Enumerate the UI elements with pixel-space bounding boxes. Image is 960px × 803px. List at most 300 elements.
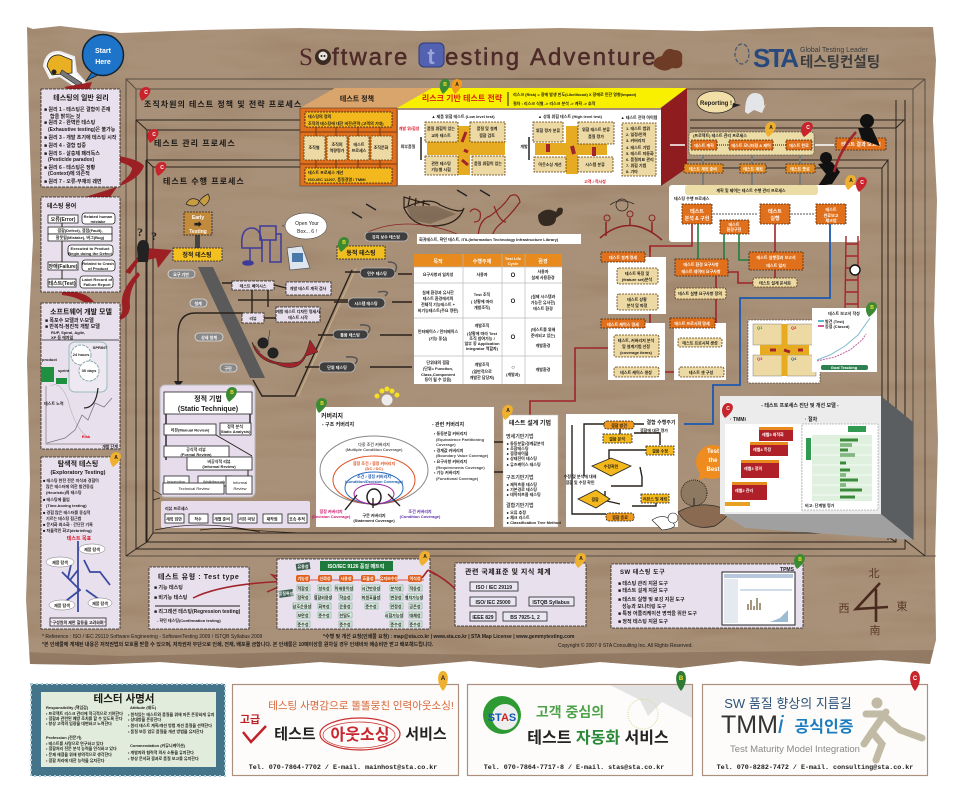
pin: C organisational: C: [144, 90, 148, 96]
ad: tester mission statement: Attitude (태도): [130, 704, 157, 710]
table: test levels: 비기능테스트(주요 평판): [418, 307, 459, 313]
quadrant chart: Q2: [791, 325, 797, 330]
panel: test execution process: 테스트: [690, 208, 704, 215]
top level characteristic boxes: 신뢰성: [319, 575, 331, 581]
test levels: 통합 테스팅: [340, 332, 360, 338]
icon: ghost: [745, 93, 766, 114]
management to execution links: 테스트 계획 준비: [689, 166, 717, 172]
V-model diagram: [168, 232, 412, 396]
panel: software development models: [41, 303, 120, 449]
panel: test type: [149, 567, 249, 629]
table: test levels: 개발조직): [474, 304, 491, 310]
panel: static technique: Technical Review: [179, 486, 210, 491]
panel: test execution process: 테스트: [825, 206, 837, 212]
project test management process: 테스트 모니터링 & 제어: [731, 142, 771, 148]
ad: TMMi certification: TMMi: [721, 711, 785, 739]
panel: coverage: (Condition/Decision Coverage): [345, 479, 404, 484]
sub characteristic labels: 공존성: [409, 603, 421, 609]
panel: test execution process: [669, 185, 860, 242]
character with question mark: ?: [151, 229, 157, 243]
panel: SW test tools: ■ 테스트 설계 지원 도구: [618, 587, 668, 594]
pin: B ad: [676, 671, 686, 691]
top level characteristic boxes: 이식성: [409, 575, 421, 581]
TMMi staircase: [725, 424, 801, 512]
panel: test execution process: 테스트: [728, 221, 740, 227]
panel: test execution process: 체크업: [825, 217, 837, 223]
table: test levels: 개발조직: [475, 361, 490, 367]
sketches: ship and ornaments: [352, 190, 662, 244]
panel: test design techniques: ▸ 체크 리스트: [506, 514, 530, 520]
table: test levels: 단위내의 결함: [426, 359, 450, 365]
panel: software development models: ■ 반복적-점진적 개발 모델: [45, 323, 100, 330]
sub characteristic labels: 적합성: [297, 585, 309, 591]
TMMi staircase: 레벨4 측정: [753, 446, 771, 452]
policy front face: 조직의 테스팅에 대한 비전/전략 (고객의 기대): [308, 120, 384, 126]
ad: tester mission statement: • 개발자와 협력적 의사 소통을 유지한다: [128, 749, 194, 755]
panel: test design specification: 테스트 특징 및: [625, 270, 649, 276]
panel: test design techniques: 테스트 설계 기법: [509, 419, 551, 427]
flow connectors: [530, 224, 830, 424]
pin: C management: C: [152, 132, 156, 138]
test outputs: 테스트 일지: [766, 262, 786, 268]
sub characteristic labels: 친밀도: [339, 612, 351, 618]
policy front face: 테스트 프로세스 개선: [308, 169, 344, 175]
panel: defect life cycle: 결함 수정: [652, 448, 668, 454]
panel: testing glossary: 결함(Defect), 결점(Fault),: [57, 227, 103, 233]
management to execution links: 테스트 종료: [790, 166, 810, 172]
sub characteristic labels: 회복성: [318, 603, 330, 609]
pin: B static: B: [230, 390, 234, 396]
panel: testing principles: ■ 원리 1 - 테스팅은 결함이 존재: [44, 106, 111, 113]
risk based test strategy top face: 리스크 (Risk) = 장애 발생 빈도(Likelihood) X 장애로 인한 영향(Impact): [513, 91, 637, 97]
panel: testing principles: ■ 원리 5 - 살충제 패러독스: [44, 150, 100, 157]
icon: chainsaw: [44, 52, 85, 88]
table: test levels: ( 상황에 따라: [471, 298, 493, 304]
strategy front face: ▲ 상위 위험 테스트 (High level test): [538, 113, 603, 119]
callout: open your box: Open Your: [295, 221, 319, 227]
regression testing bar: 회귀테스트, 확인 테스트, ITIL(Information Technology Infrastructure Library): [419, 236, 559, 242]
footer notes: *본 인쇄물에 게재된 내용은 저작권법의 보호를 받을 수 있으며, 저작권자 무단으로 인쇄, 전재, 배포를 금합니다. 본 인쇄물은 10매이상을 원하실 경우 인쇄비와 배송비만 받고 배포해드립니다.: [42, 641, 434, 648]
ad: TMMi certification: SW 품질 향상의 지름길: [724, 696, 852, 711]
table: test levels: 실제 환경과 유사한: [422, 289, 454, 295]
ad: automation service: Tel. 070-7864-7717-8 / E-mail. stas@sta.co.kr: [484, 764, 664, 772]
table: test levels: 사용자: [537, 268, 549, 274]
quadrant chart: Q1: [757, 325, 763, 330]
panel: testing principles: (Context)에 의존적: [48, 170, 90, 177]
pin: C execution right: [856, 177, 867, 192]
sub characteristic labels: 분석성: [390, 585, 402, 591]
risk based test strategy top face: 리스크 기반 테스트 전략: [422, 93, 503, 103]
panel: static technique: 공식적 리뷰: [186, 446, 206, 452]
panel: exploratory testing: ■ 경험 많은 테스터를 중심적: [43, 509, 91, 515]
panel: coverage: (Boundary Value Coverage): [436, 453, 489, 458]
panel: coverage: (Requirements Coverage): [436, 465, 485, 470]
panel: review process: 개별 준비: [214, 516, 230, 522]
panel: test type: - 확인 테스팅(Confirmation testing): [157, 617, 221, 623]
icon: blue t badge: [419, 43, 444, 69]
panel: test execution process: 완료보고: [824, 212, 839, 218]
panel: test execution process: 테스팅 수행 프로세스: [674, 195, 710, 201]
panel: defect life cycle: 리뷰스 및 계획: [643, 496, 667, 502]
pin: A ISO: A: [423, 554, 427, 560]
assessment matrix: [802, 424, 878, 510]
panel: SW test tools: ■ 정적 테스팅 지원 도구: [618, 618, 668, 625]
sprint diagram: sprint: [58, 368, 70, 373]
panel: exploratory testing: 탐색적 테스팅: [58, 459, 98, 468]
side face: [661, 88, 687, 186]
sub characteristic labels: 정확성: [297, 594, 309, 600]
panel: international standards: [455, 563, 586, 626]
panel: defect life cycle: 수정 및 분석에 대해: [564, 473, 597, 479]
ad: TMMi certification: [702, 684, 928, 776]
compass 4: 南: [870, 624, 880, 637]
quadrant diagram: low level: 관련 테스팅: [431, 160, 451, 166]
pin: C management right: [801, 122, 813, 137]
white double arrow: [670, 144, 685, 146]
sub characteristic labels: [293, 585, 424, 627]
test levels: 단위 테스팅: [327, 364, 347, 370]
panel: static technique: (Informal Review): [202, 464, 236, 469]
compass 4: 西: [838, 603, 850, 615]
panel: static technique: 리뷰(Manual Review): [171, 426, 210, 432]
sprint diagram: product: [42, 357, 58, 362]
early testing sign: ➡: [194, 220, 202, 229]
panel: SW test tools: ■ 테스팅 관리 지원 도구: [618, 580, 668, 587]
panel: testing principles: [41, 89, 120, 187]
panel: test procedure specification: 테스트 셋 구성: [689, 369, 713, 375]
pin: B tools: B: [798, 557, 802, 563]
compass 4: [838, 567, 908, 637]
assessment matrix: 비고: 단계별 평가: [805, 502, 835, 508]
STA logo: 테스팅컨설팅: [800, 54, 880, 71]
panel: test procedure specification: 테스트 프로시져 명세: [674, 320, 710, 326]
V line: [253, 270, 352, 396]
nested coverage ellipses: [320, 436, 428, 505]
title letters: Adventure: [530, 44, 657, 71]
ad: outsourcing service: Tel. 070-7864-7702 / E-mail. mainhost@sta.co.kr: [249, 764, 437, 772]
TMMi staircase: 레벨2 관리: [735, 487, 753, 493]
heading: organisational process: 조직차원의 테스트 정책 및 전략 프로세스: [144, 99, 302, 109]
test outputs: 테스트 환경 요구사항: [683, 261, 719, 267]
policy front face: 프로세스: [352, 147, 367, 153]
panel: testing principles: 함을 밝히는 것: [50, 113, 81, 120]
island with tree sketch: [652, 480, 729, 530]
panel: exploratory testing: (Time-boxing testing): [46, 503, 87, 508]
panel: coverage: 구문 커버리지: [362, 512, 386, 518]
callout: reporting: [697, 91, 741, 113]
panel: test execution process: 계획 및 제어는 테스트 수행 관리 프로세스: [716, 187, 786, 193]
sub characteristic grid: [293, 585, 422, 627]
ad: TMMi certification: Tel. 070-8282-7472 / E-mail. consulting@sta.co.kr: [717, 764, 913, 772]
pin: B dynamic: B: [342, 240, 346, 246]
basis boxes: 개발 테스트 디자인 명세서: [276, 308, 320, 314]
blood splashes and red swooshes: [62, 82, 172, 322]
table: test levels: 조직 참여가능 /: [469, 335, 496, 341]
panel: static technique: 정적 분석: [227, 423, 243, 429]
panel: defect life cycle: 결함 및 수정 확인: [565, 479, 595, 485]
side and bottom faces: [881, 396, 913, 540]
panel: SW test tools: ■ 특정 어플리케이션 영역을 위한 도구: [618, 610, 697, 617]
sub characteristic labels: 준수성: [365, 603, 377, 609]
callout: start here: Here: [95, 59, 111, 66]
table: test levels: 개발한 담당자): [470, 374, 495, 380]
policy front face: 테스트: [353, 141, 365, 147]
panel: international standards: ISO / IEC 29119: [476, 585, 512, 591]
pin: C execution: [155, 162, 166, 176]
ad: tester mission statement: • 결함 처리에 대한 능력을 유지한다: [46, 757, 105, 763]
panel: test execution process: 실행: [770, 215, 780, 222]
panel: test case specification: 및 설계기법 선정: [622, 343, 650, 349]
ad: tester mission statement: Commendation (커뮤니케이션): [130, 742, 186, 748]
strategy front face: ▲ 제품 위험 테스트 (Low level test): [431, 113, 495, 119]
panel: testing glossary: [41, 197, 120, 292]
panel: exploratory testing: (Exploratory Testing): [51, 470, 106, 476]
character with question mark: [137, 225, 157, 262]
policy front face: 조직문화: [374, 144, 389, 150]
panel: testing principles: (Exhaustive testing)은 불가능: [48, 126, 116, 133]
panel: software development models: 소프트웨어 개발 모델: [50, 307, 112, 316]
ad: tester mission statement: Responsibility (책임감): [46, 704, 89, 710]
panel: test case specification: 테스트, 커버리지 분석: [618, 337, 655, 343]
pin: C process assessment: C: [726, 406, 730, 412]
panel: testing principles: ■ 원리 2 - 완벽한 테스팅: [44, 119, 96, 126]
panel: test case specification: [601, 319, 665, 380]
panel: static technique: Informal: [233, 480, 247, 485]
panel: test report chart: 종결 (Closed): [825, 323, 850, 329]
title letters: ftware: [332, 44, 409, 71]
panel: static technique: (Static Technique): [178, 406, 238, 413]
top level characteristic boxes: 유지보수성: [380, 575, 399, 581]
title letters: [299, 44, 657, 71]
table: test levels: 수행주체: [473, 258, 492, 265]
panel: coverage: ▪ 동등분할 커버리지: [434, 430, 467, 436]
STA logo: STA: [753, 43, 799, 73]
table: test levels: 준비되고 있는): [531, 332, 556, 338]
pin: B report: B: [870, 305, 874, 311]
sprint diagram: 24 hours: [73, 352, 90, 357]
dynamic testing label: [337, 246, 385, 259]
character with question mark: ?: [137, 225, 143, 239]
footer notes: * Reference : ISO / IEC 29119 Software Engineering - SoftwareTesting 2009 / ISTQB Syllabus 2009: [42, 634, 263, 640]
pin: A design techniques: A: [506, 408, 510, 414]
pin: A standards: A: [579, 556, 583, 562]
quadrant diagram: high level: 시스템 분류: [585, 161, 605, 167]
panel: coverage: (Decision Coverage): [312, 514, 351, 519]
level labels: 요구 기반: [173, 271, 189, 277]
TMMi staircase: 레벨5 최적화: [762, 431, 784, 437]
policy front face: 조직별: [308, 144, 320, 150]
explosion figure: [252, 330, 318, 368]
quadrant diagram: high level: 위험 테스트 분류: [582, 126, 610, 132]
sub characteristic labels: 안정성: [390, 603, 402, 609]
basis boxes: 테스트 베이시스: [240, 282, 267, 288]
table: test levels: 인터페이스 / 인터페이스: [418, 328, 458, 334]
ad: TMMi certification: 공식인증: [795, 718, 854, 736]
risk based test strategy top face: [397, 88, 687, 108]
decorative ground sketch: [153, 490, 335, 533]
defect line chart: 개발 단계: [102, 443, 118, 449]
strategy item list: 4. 테스트 기법: [626, 144, 650, 150]
ad: tester mission statement: • 항상 고객의 입장을 대변하고 노력한다: [46, 720, 112, 726]
panel: test type: ■ 비기능 테스팅: [154, 594, 188, 601]
sub characteristic labels: 이해용이성: [335, 585, 354, 591]
quadrant diagram: high level: 위험 평가 분류: [536, 127, 560, 133]
sub characteristic labels: 준수성: [339, 621, 351, 627]
ad: TMMi certification: Test Maturity Model Integration: [730, 744, 860, 755]
quadrant diagram: high level: [533, 122, 614, 174]
callout: open your box: Box... 6 !: [297, 229, 317, 235]
panel: testing principles: 테스팅의 일반 원리: [53, 93, 109, 102]
panel: coverage: 커버리지: [321, 412, 343, 420]
panel: test design techniques: ▸ 동등분할/경계값분석: [506, 440, 545, 446]
pin: C execution right: C: [860, 180, 864, 186]
sub characteristic labels: 결함허용성: [314, 594, 333, 600]
test outputs: [675, 252, 803, 299]
table: test levels: 실제 사용환경: [531, 274, 555, 280]
pin: B dynamic: [338, 237, 349, 252]
panel: international standards: IEEE 829: [472, 615, 494, 621]
quadrant chart: [748, 320, 820, 383]
pin: C ad: C: [913, 676, 918, 682]
regression testing bar: [417, 234, 581, 244]
pin: B coverage: [316, 398, 327, 413]
panel: defect life cycle: 결함: [591, 496, 599, 502]
panel: testing glossary: Label Record of: [82, 277, 113, 282]
panel: defect life cycle: 결함에 대한 평가: [640, 427, 668, 433]
strategy item list: 3. 커버리지: [626, 137, 645, 143]
thought clouds: 제품 탐색: [54, 602, 70, 608]
table: test levels: 환경: [538, 258, 548, 265]
callout: test the best: the: [708, 458, 718, 464]
ad: tester mission statement: • 원칙있는 테스트와 품질을 위해 자존 존중하게 유지: [128, 711, 215, 717]
panel: coverage: 조건 / 결정 커버리지: [357, 473, 391, 479]
panel: SW test tools: TPMS: [780, 567, 795, 573]
table: test levels: 테스트 환경에서의: [423, 295, 454, 301]
panel: coverage: 다중 조건 커버리지: [358, 441, 390, 447]
pin: B ad: B: [679, 676, 684, 682]
panel: test execution process: 테스트: [768, 208, 782, 215]
strategy item list: 8. 기타: [626, 168, 638, 174]
panel: static technique: (Formal Review): [181, 452, 212, 457]
management to execution links: [684, 155, 815, 185]
thought clouds: 제품 탐색: [52, 559, 68, 565]
basis boxes: [232, 281, 331, 323]
callout: reporting: Reporting !: [700, 101, 732, 107]
panel: review process: [161, 501, 310, 528]
panel: testing glossary: Executed to Product: [71, 246, 110, 251]
panel: coverage: ▪ 경계값 커버리지: [434, 447, 464, 453]
pin: A ISO: [419, 551, 430, 566]
project test management process: 테스트 완료: [789, 142, 809, 148]
quadrant diagram: low level: [425, 122, 505, 175]
pin: C process assessment: [722, 403, 733, 418]
thought clouds: 제품 탐색: [92, 600, 108, 606]
thought clouds: 제품 탐색: [84, 546, 100, 552]
panel: test design specification: 분석 및 파정: [627, 302, 648, 308]
panel: testing principles: (Pesticide paradox): [48, 157, 94, 163]
ad: outsourcing service: [232, 684, 458, 776]
STA logo: [735, 43, 880, 73]
pin: A execution: [845, 175, 856, 190]
pin: A strategy: A: [455, 82, 459, 88]
test outputs: 테스트 데이터 요구사항: [681, 268, 721, 274]
callout: start here: Start: [95, 48, 112, 55]
ad: tester mission statement: • 프로젝트 리스크 관리에 적극적으로 기여한다: [46, 710, 123, 716]
panel: static technique: [160, 385, 255, 497]
panel: coverage: [312, 407, 494, 527]
panel: test report chart: [812, 308, 877, 372]
sprint diagram: 30 days: [82, 368, 97, 373]
panel: review process: 계획 입안: [166, 516, 182, 522]
sub characteristic labels: 대체성: [409, 612, 421, 618]
callout: open your box: [282, 213, 327, 239]
table: test levels: 요구사항과 일치성: [423, 271, 454, 277]
pin: A management: A: [769, 125, 773, 131]
policy front face: 역량평가: [330, 147, 345, 153]
footer notes: [42, 633, 693, 649]
panel: testing principles: ■ 원리 3 - 개발 초기에 테스팅 시작: [44, 134, 117, 141]
policy front face: 테스팅의 정의: [308, 113, 332, 119]
panel: static technique: (Static Analysis): [220, 429, 251, 434]
sub characteristic labels: 시험가능성: [385, 612, 404, 618]
panel: test design techniques: ▸ 조합테스팅: [506, 445, 529, 451]
panel: coverage: (Multiple Condition Coverage): [346, 447, 403, 452]
pin: A ad: [438, 671, 448, 691]
panel: test design techniques: ▸ 제어흐름 테스팅: [506, 481, 537, 487]
sub characteristic labels: 시간반응성: [362, 585, 381, 591]
panel: test report chart: 테스트 보고서 작성: [828, 310, 860, 316]
panel: international standards: ISO/ IEC 25000: [475, 600, 511, 606]
table: test levels: ○: [511, 365, 515, 371]
pin: A strategy: [452, 79, 462, 94]
panel: testing glossary: of Product: [88, 266, 109, 271]
quadrant diagram: low level: 품질 위험이 있는: [474, 160, 502, 166]
ad: outsourcing service: 테스팅 사명감으로 똘똘뭉친 인력아웃소싱!: [268, 700, 454, 712]
panel: defect life cycle: 결함 종료: [612, 514, 628, 520]
ad: tester mission statement: • 결함과 관련된 예방 조치를 할 수 있도록 한다: [46, 715, 123, 721]
policy front face: ISO-IEC 12207, 품질경영 / TMMi: [308, 176, 366, 182]
ad: outsourcing service: 아웃소싱: [331, 726, 389, 744]
panel: review process: 재작업: [266, 516, 278, 522]
basis boxes: 리뷰: [249, 315, 257, 321]
table: test levels: Cycle: [508, 261, 519, 266]
panel: coverage: 결정 조건 / 결정 커버리지: [353, 460, 395, 466]
blue exploration paths: [62, 541, 110, 612]
test levels: 시스템 테스팅: [354, 300, 378, 306]
panel: test design specification: 테스트 상황: [627, 296, 647, 302]
level labels: 구현: [224, 365, 232, 371]
strategy item list: 7. 위험 기법: [626, 162, 647, 168]
panel: coverage: (Statement Coverage): [353, 518, 395, 523]
early testing sign: [184, 194, 212, 248]
process level headings: [144, 99, 302, 186]
pin: B static: [226, 387, 237, 402]
table: test levels: (일반적으로: [472, 368, 492, 374]
ad: outsourcing service: 고급: [240, 713, 260, 726]
strategy front face: 개발 위/험성: [399, 125, 420, 131]
nested process frames: [126, 79, 936, 556]
panel: test report chart: 발견 (Test): [825, 318, 845, 324]
panel: coverage: (Equivalence Partitioning: [436, 437, 485, 442]
table: test levels: 전체적 기능테스트 +: [421, 301, 456, 307]
sub characteristic labels: 운용성: [339, 603, 351, 609]
compass 4: 北: [868, 567, 880, 580]
panel: testing glossary: Failure Report: [83, 282, 111, 287]
torn parchment background: [20, 20, 945, 675]
panel: static technique: Inspection: [167, 479, 185, 484]
dynamic testing label: 동적 테스팅: [346, 249, 376, 257]
compass 4: 東: [896, 600, 908, 613]
